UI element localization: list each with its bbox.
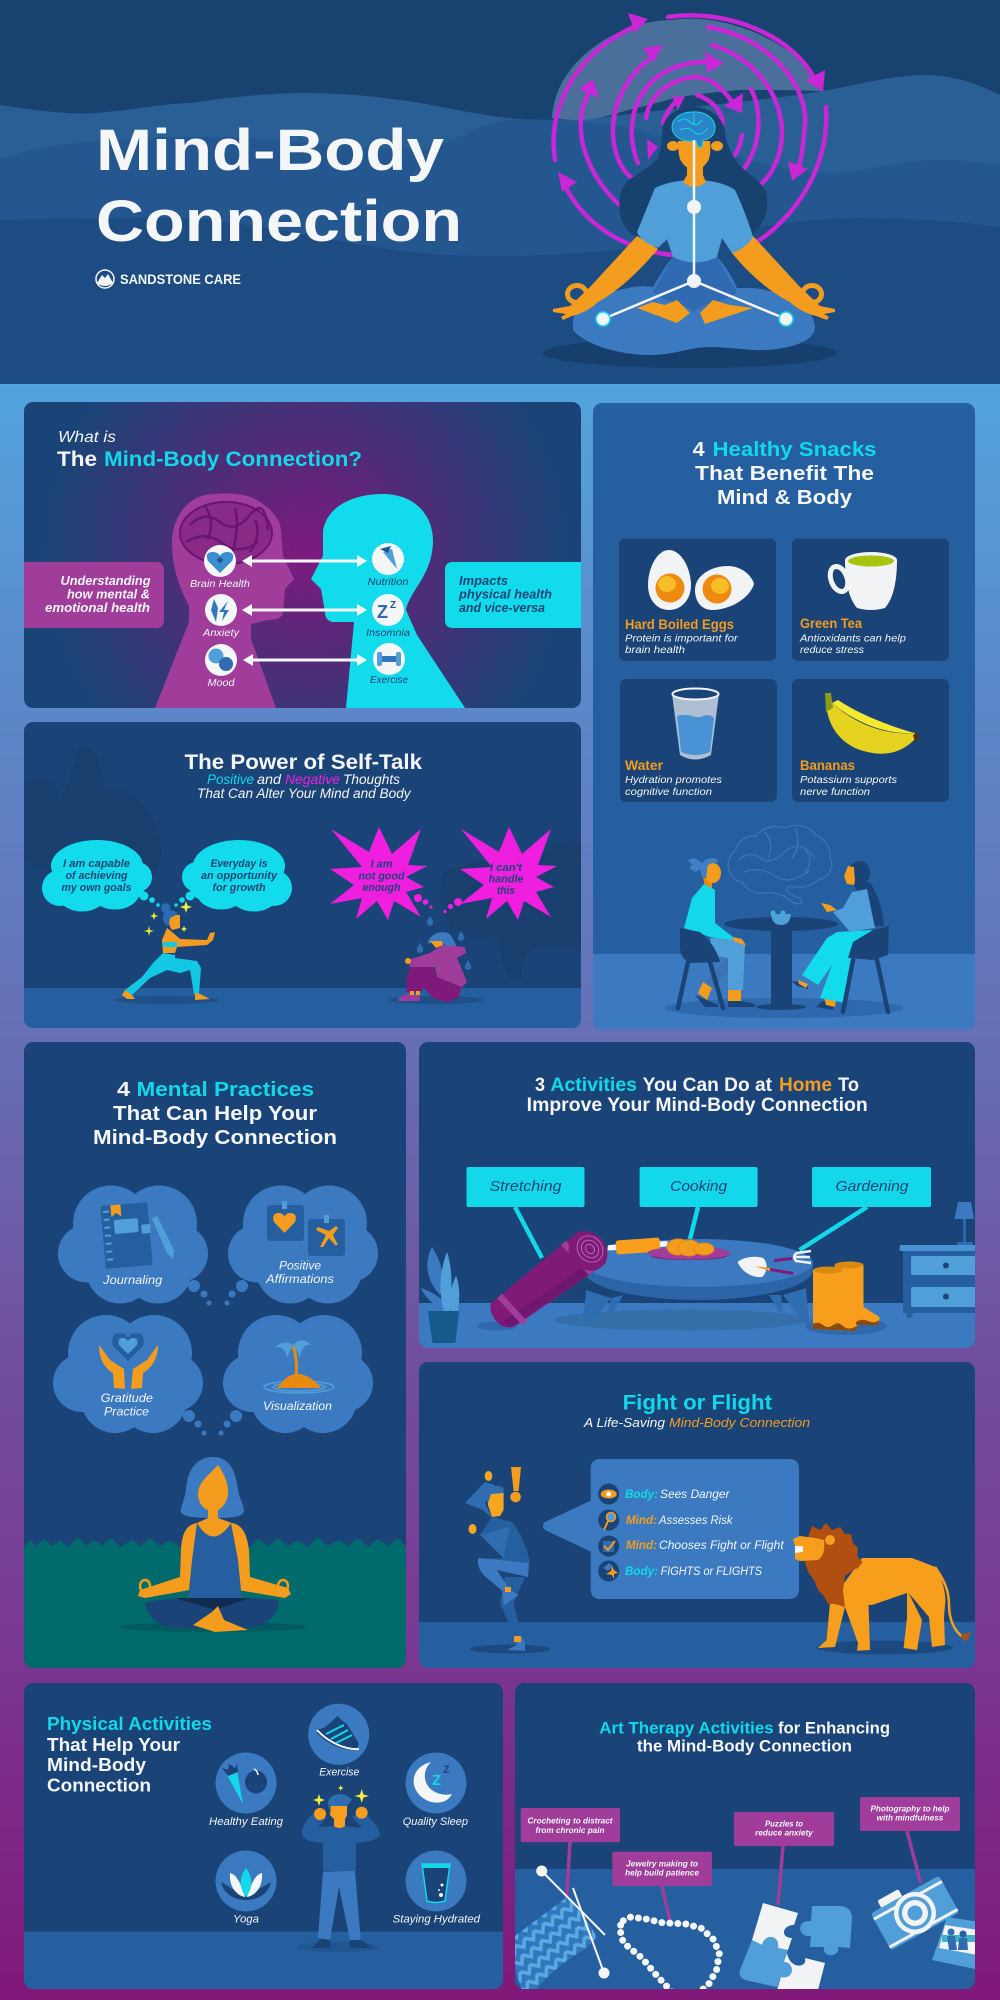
starburst: can't handle this: I can't: [490, 862, 523, 874]
heading: [184, 751, 422, 801]
starburst: not good enough: [330, 827, 427, 920]
hair: [619, 107, 767, 237]
legs: [573, 257, 815, 355]
panel: 3 activities at home: [419, 1042, 976, 1348]
heading: Positive: [207, 772, 254, 787]
label: jewelry making: [612, 1852, 712, 1886]
title: Mind-Body: [96, 118, 444, 183]
icon: exercise: [373, 643, 405, 675]
thought cloud: capable: my own goals: [62, 882, 132, 894]
heading: [583, 1392, 810, 1430]
panel: physical activities: [24, 1683, 503, 1990]
icon labels: Insomnia: [366, 627, 410, 639]
label: gardening: [812, 1167, 931, 1207]
heading: That Can Help Your: [113, 1103, 317, 1125]
floor: [419, 1622, 975, 1668]
thought cloud: opportunity: for growth: [212, 882, 266, 894]
plate of cookies: [648, 1239, 730, 1260]
heading: [57, 429, 362, 471]
heading: Mind-Body: [47, 1755, 146, 1775]
thought cloud: capable: I am capable: [63, 858, 130, 870]
heading: Improve Your Mind-Body Connection: [527, 1095, 868, 1116]
floor: [419, 1303, 975, 1348]
icon: exercise shoe: [308, 1704, 369, 1765]
row: sees danger: [598, 1484, 731, 1504]
label: crocheting: from chronic pain: [536, 1825, 604, 1835]
thought bubbles: [183, 1280, 248, 1436]
heading: Home: [779, 1075, 832, 1096]
callout: understanding mental health: how mental &: [67, 588, 150, 602]
card: bananas: [792, 679, 949, 802]
icon: insomnia: [372, 594, 404, 626]
icon: exclamation mark: [510, 1467, 521, 1502]
heading: 4: [693, 439, 706, 461]
row: assesses risk: Assesses Risk: [658, 1515, 734, 1527]
icon: nutrition: [372, 543, 404, 575]
heading: To: [838, 1075, 859, 1096]
icon labels: [209, 1767, 481, 1926]
heading: Mental Practices: [136, 1079, 314, 1101]
thought cloud: gratitude practice: Practice: [104, 1404, 149, 1418]
icon labels: Exercise: [319, 1767, 359, 1779]
card: water: [620, 679, 777, 802]
thought cloud: positive affirmations: Affirmations: [265, 1272, 334, 1286]
heading: Mind-Body Connection: [93, 1127, 337, 1149]
connector lines: [515, 1207, 867, 1258]
starburst: not good enough: enough: [362, 882, 401, 894]
title: [96, 118, 462, 254]
label: jewelry making: help build patience: [625, 1868, 699, 1878]
thought cloud: capable: [42, 840, 152, 912]
brain: [672, 112, 715, 147]
heading: Mind & Body: [717, 487, 853, 509]
thought cloud: gratitude practice: [53, 1315, 203, 1433]
icon labels: Yoga: [233, 1914, 259, 1926]
logo: Sandstone Care: SANDSTONE CARE: [120, 271, 241, 287]
label: stretching: [466, 1167, 584, 1207]
thought cloud: positive affirmations: [228, 1186, 378, 1304]
label: photography: [860, 1797, 960, 1831]
row: assesses risk: Mind:: [626, 1515, 657, 1527]
heading: Thoughts: [343, 772, 400, 787]
icon labels: Mood: [208, 677, 236, 689]
thought cloud: positive affirmations: Positive: [279, 1258, 321, 1272]
card: bananas: nerve function: [800, 787, 870, 798]
feet: [637, 300, 753, 324]
icon: insomnia: Z: [390, 600, 396, 611]
icon labels: Brain Health: [190, 578, 250, 590]
figure: yoga lunge: [113, 903, 219, 1004]
icon: insomnia: Z: [377, 602, 388, 622]
label: cooking: [640, 1167, 758, 1207]
label: puzzles: [734, 1812, 834, 1846]
plant: [421, 1247, 459, 1343]
rolling pin: [607, 1237, 668, 1255]
heading: and: [257, 772, 282, 787]
label: crocheting: Crocheting to distract: [528, 1816, 614, 1826]
card: water: Hydration promotes: [625, 775, 722, 786]
heading: Physical Activities: [47, 1714, 212, 1734]
panel: 4 mental practices: [24, 1042, 406, 1668]
arms: [553, 236, 835, 320]
yoga mat: [477, 1223, 615, 1330]
card: hard boiled eggs: brain health: [625, 645, 685, 656]
row: fights or flights: Body:: [625, 1566, 658, 1578]
label: jewelry making: Jewelry making to: [626, 1859, 698, 1869]
garden tools: [738, 1251, 811, 1277]
thought cloud: capable: of achieving: [66, 870, 128, 882]
table: [771, 924, 792, 1006]
heading: Connection: [47, 1776, 151, 1796]
row: chooses fight or flight: Chooses Fight or Flight: [659, 1540, 785, 1552]
nightstand and lamp: [900, 1202, 976, 1318]
table: [555, 1239, 813, 1330]
label: photography: Photography to help: [870, 1804, 950, 1814]
label: stretching: Stretching: [490, 1178, 562, 1195]
heading: for Enhancing: [778, 1719, 890, 1737]
starburst: can't handle this: handle: [488, 874, 524, 886]
heading: Art Therapy Activities: [599, 1719, 774, 1737]
crochet and needles: [515, 1866, 610, 1990]
icon: brain health: [204, 545, 236, 577]
row: chooses fight or flight: [598, 1536, 785, 1556]
card: green tea: reduce stress: [800, 645, 864, 656]
icon: yoga lotus: [216, 1850, 276, 1912]
icon labels: Anxiety: [202, 627, 240, 639]
starburst: not good enough: not good: [358, 870, 405, 882]
floor shadow: [665, 998, 903, 1018]
thought cloud: opportunity: Everyday is: [210, 858, 268, 870]
card: water: Water: [625, 757, 664, 773]
title: Connection: [96, 189, 462, 254]
icon: staying hydrated: [406, 1850, 466, 1912]
panel: the power of self-talk: [24, 722, 581, 1028]
row: sees danger: Body:: [625, 1489, 658, 1501]
heading: [599, 1719, 890, 1755]
thought bubbles: positive: [140, 892, 194, 907]
figure: lion: [793, 1523, 971, 1654]
row: fights or flights: [598, 1560, 762, 1582]
faint brain outline: [728, 825, 832, 904]
starburst: can't handle this: this: [497, 885, 515, 897]
icon labels: Exercise: [370, 674, 408, 686]
heading: Mind-Body Connection: [669, 1416, 810, 1430]
heading: That Help Your: [47, 1735, 180, 1755]
thought cloud: journaling: Journaling: [102, 1273, 163, 1287]
heading: Negative: [285, 772, 340, 787]
heading: [693, 439, 876, 509]
starburst: not good enough: I am: [370, 858, 393, 870]
face and neck: [667, 141, 723, 187]
thought cloud: journaling: [58, 1186, 208, 1304]
heading: [527, 1075, 868, 1116]
icon: anxiety: [205, 594, 237, 626]
right person: [792, 861, 889, 1012]
label: puzzles: Puzzles to: [765, 1819, 803, 1829]
thought cloud: visualization: Visualization: [263, 1399, 332, 1413]
connector lines: [567, 1831, 921, 1920]
icon: mood: [205, 644, 237, 676]
bowl: [770, 910, 791, 925]
icon labels: Staying Hydrated: [393, 1914, 481, 1926]
thought cloud: opportunity: [182, 840, 292, 912]
icon: quality sleep: [406, 1752, 466, 1814]
card: hard boiled eggs: [619, 538, 776, 661]
callout: understanding mental health: Understanding: [60, 574, 151, 588]
panel: art therapy activities: [515, 1683, 980, 1992]
card: green tea: Green Tea: [800, 615, 862, 631]
heading: [93, 1079, 337, 1149]
heading: The Power of Self-Talk: [184, 751, 422, 774]
thought bubbles: negative: [414, 894, 462, 913]
thought cloud: gratitude practice: Gratitude: [101, 1391, 153, 1405]
figure: strong person: [298, 1794, 380, 1952]
row: chooses fight or flight: Mind:: [626, 1540, 657, 1552]
purple head: [155, 493, 294, 708]
heading: What is: [58, 429, 116, 446]
heading: That Benefit The: [695, 463, 874, 485]
card: green tea: [792, 538, 949, 661]
heading: Mind-Body Connection?: [104, 448, 362, 471]
label: crocheting: [521, 1808, 620, 1842]
sparkles: [313, 1785, 369, 1806]
heading: [47, 1714, 212, 1796]
chakra lines and nodes: [596, 140, 793, 326]
panel: what is the mind-body connection: [24, 402, 581, 708]
figure: startled man: [465, 1471, 550, 1654]
icon: quality sleep: Z: [443, 1764, 450, 1776]
magenta energy arcs: [554, 13, 826, 255]
row: fights or flights: FIGHTS or FLIGHTS: [661, 1566, 762, 1578]
heading: A Life-Saving: [583, 1416, 665, 1430]
heading: 3: [535, 1075, 545, 1096]
card: bananas: Potassium supports: [800, 775, 897, 786]
background trees: [24, 746, 581, 979]
callout: impacts physical health: physical health: [458, 588, 552, 602]
heading: The: [57, 448, 97, 471]
label: cooking: Cooking: [670, 1178, 728, 1195]
rain boots: [805, 1262, 887, 1335]
callout: understanding mental health: [24, 562, 164, 628]
callout: impacts physical health: [445, 562, 581, 628]
heading: 4: [117, 1079, 131, 1101]
floor: [24, 1932, 503, 1990]
photo print: [932, 1917, 980, 1970]
logo: Sandstone Care: [96, 270, 241, 288]
callout: understanding mental health: emotional health: [45, 601, 150, 615]
icon: healthy eating: [216, 1752, 276, 1814]
connection arrows: [242, 555, 367, 666]
shirt: [637, 180, 753, 262]
starburst: can't handle this: [460, 827, 557, 920]
label: gardening: Gardening: [836, 1178, 909, 1195]
panel: 4 healthy snacks: [593, 403, 975, 1029]
grass: [24, 1537, 406, 1668]
row: sees danger: Sees Danger: [660, 1489, 731, 1501]
heading: That Can Alter Your Mind and Body: [197, 786, 412, 801]
icon labels: Nutrition: [368, 576, 409, 588]
card: water: cognitive function: [625, 787, 712, 798]
puzzle pieces: [740, 1903, 852, 1990]
thought cloud: visualization: [223, 1315, 373, 1433]
left person: [678, 858, 755, 1008]
header band: [0, 0, 1000, 384]
cyan head: [311, 494, 465, 708]
jewelry beads: [619, 1917, 719, 1992]
card: hard boiled eggs: Protein is important for: [625, 634, 738, 644]
row: assesses risk: [598, 1510, 734, 1530]
brain illustration: [180, 502, 272, 564]
panel: fight or flight: [419, 1362, 975, 1668]
meditating woman illustration with energy rings: [543, 13, 837, 368]
camera: [867, 1869, 959, 1950]
scene: two people at table: [665, 825, 903, 1018]
icon: quality sleep: Z: [432, 1772, 441, 1789]
heading: Healthy Snacks: [712, 439, 876, 461]
label: photography: with mindfulness: [877, 1813, 944, 1823]
callout: impacts physical health: and vice-versa: [459, 601, 545, 615]
figure: meditating woman: [119, 1457, 307, 1632]
callout: impacts physical health: Impacts: [459, 574, 508, 588]
card: bananas: Bananas: [800, 757, 855, 773]
heading: You Can Do at: [643, 1075, 773, 1096]
ground: [24, 988, 581, 1028]
floor: [593, 954, 975, 1029]
sparkles: [144, 901, 192, 936]
speech bubble: [543, 1459, 799, 1599]
icon labels: Healthy Eating: [209, 1816, 284, 1828]
thought cloud: opportunity: an opportunity: [201, 870, 278, 882]
ground shadow: [543, 338, 837, 368]
card: hard boiled eggs: Hard Boiled Eggs: [625, 616, 734, 632]
card: green tea: Antioxidants can help: [799, 634, 906, 644]
heading: the Mind-Body Connection: [637, 1737, 852, 1755]
figure: sad sitting person: [388, 916, 484, 1004]
floor: [515, 1869, 975, 1989]
heading: Fight or Flight: [623, 1392, 772, 1414]
heading: Activities: [550, 1075, 637, 1096]
icon labels: [190, 576, 410, 689]
icon labels: Quality Sleep: [403, 1816, 468, 1828]
label: puzzles: reduce anxiety: [755, 1828, 814, 1838]
translucent halo: [552, 19, 823, 120]
